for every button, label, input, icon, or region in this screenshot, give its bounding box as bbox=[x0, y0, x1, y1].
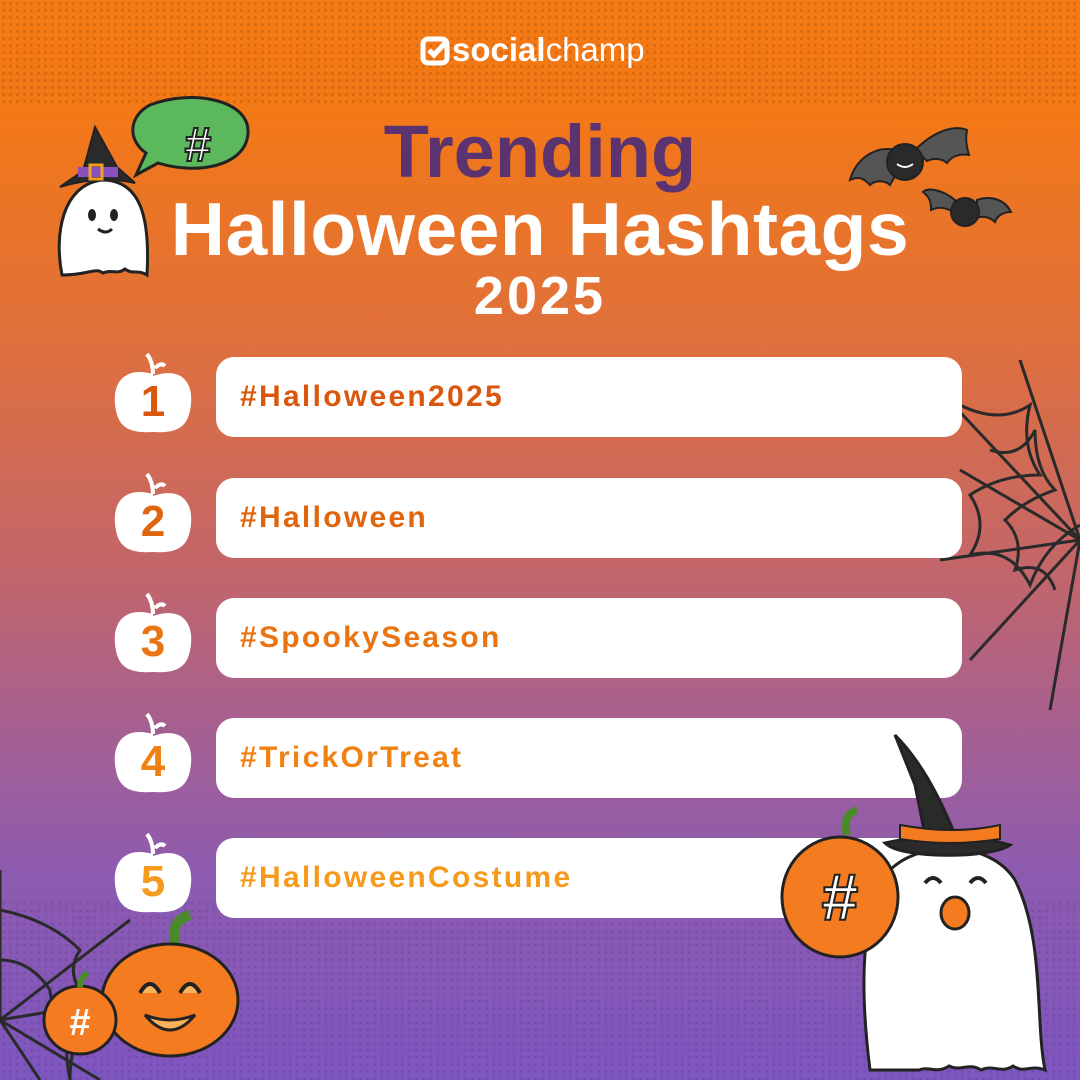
title: Halloween Hashtags bbox=[171, 187, 909, 271]
pumpkins bottom left bbox=[42, 910, 240, 1058]
text: 1 bbox=[141, 377, 165, 426]
bats bbox=[848, 127, 1013, 227]
title: 2025 bbox=[474, 266, 606, 326]
title: Trending bbox=[384, 110, 696, 193]
spider web bottom left bbox=[0, 870, 131, 1080]
list item 1 bbox=[114, 352, 962, 437]
logo: socialchamp: socialchamp bbox=[452, 31, 645, 68]
list item 4 bbox=[114, 712, 962, 798]
list item 5 bbox=[114, 832, 912, 918]
ghost with witch hat holding pumpkin bbox=[780, 734, 1047, 1072]
text: #TrickOrTreat bbox=[240, 741, 463, 774]
text: 2 bbox=[141, 497, 165, 546]
ghost with witch hat holding pumpkin: # bbox=[822, 860, 858, 934]
list item 2 bbox=[114, 472, 962, 558]
pumpkins bottom left: # bbox=[69, 1002, 91, 1044]
title bbox=[171, 110, 909, 326]
text: #HalloweenCostume bbox=[240, 861, 573, 894]
ghost with witch hat and hashtag bubble bbox=[58, 96, 250, 278]
text: 5 bbox=[141, 857, 165, 906]
ghost with witch hat and hashtag bubble: # bbox=[185, 119, 211, 172]
text: #SpookySeason bbox=[240, 621, 502, 654]
text: 3 bbox=[141, 617, 165, 666]
spider web right bbox=[940, 360, 1080, 710]
list item 3 bbox=[114, 592, 962, 678]
text: 4 bbox=[141, 737, 165, 786]
text: #Halloween bbox=[240, 501, 428, 534]
text: #Halloween2025 bbox=[240, 380, 504, 413]
